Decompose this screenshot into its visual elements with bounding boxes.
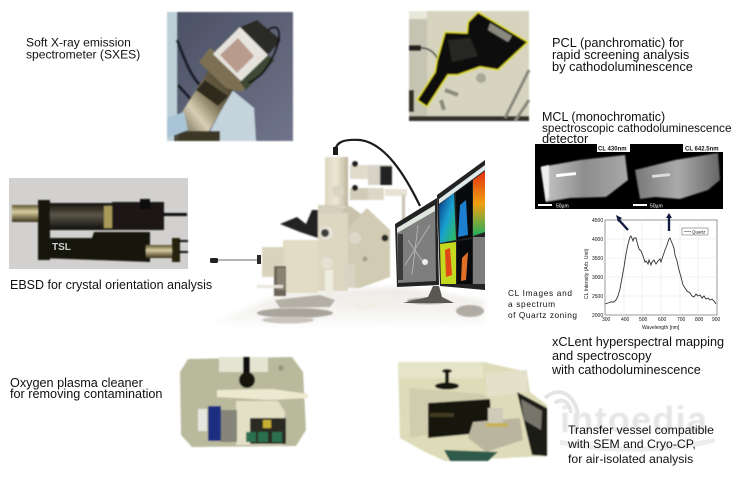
text: CL images caption: of Quartz zoning <box>508 310 577 320</box>
image: EBSD detector <box>9 178 188 269</box>
text: PCL label: PCL (panchromatic) for <box>552 35 685 50</box>
axis titles: Wavelength [nm] <box>642 325 680 331</box>
text: xCLent label: xCLent hyperspectral mapping <box>552 335 724 349</box>
text: oxygen plasma cleaner label: for removing contamination <box>10 387 162 401</box>
text: CL images caption: a spectrum <box>508 299 555 309</box>
arrow: blue peak arrow right <box>666 213 672 231</box>
text: CL images caption: CL Images and <box>508 288 572 298</box>
text: xCLent label: and spectroscopy <box>552 349 652 363</box>
CL image 642.5nm: 50µm <box>650 204 663 210</box>
CL image 642.5nm: CL 642.5nm <box>685 146 719 152</box>
table surface and shadows <box>213 287 485 326</box>
monitor right with colour maps <box>437 160 485 290</box>
y axis ticks: 3500 <box>592 256 603 262</box>
CL image 430nm <box>535 144 630 210</box>
x axis ticks: 900 <box>712 317 721 323</box>
text: xCLent label <box>551 335 724 377</box>
cable <box>335 140 420 206</box>
spectrum line <box>605 236 716 304</box>
text: xCLent label: with cathodoluminescence <box>551 363 701 377</box>
text: MCL label: detector <box>542 131 589 146</box>
text: oxygen plasma cleaner label <box>10 376 162 401</box>
monitor left <box>395 198 454 303</box>
black side detector <box>280 210 318 238</box>
image: CL quartz images <box>535 144 723 210</box>
text: transfer vessel label <box>567 423 714 466</box>
text: PCL label: by cathodoluminescence <box>552 59 693 74</box>
image: PCL panchromatic detector <box>409 11 529 121</box>
y axis ticks: 3000 <box>592 275 603 281</box>
text: oxygen plasma cleaner label: Oxygen plasma cleaner <box>10 376 143 390</box>
text: CL images caption <box>508 288 577 320</box>
y axis ticks: 4000 <box>592 237 603 243</box>
CL image 430nm: CL 430nm <box>598 146 627 152</box>
watermark <box>545 392 715 449</box>
x axis ticks: 300 <box>602 317 611 323</box>
text: SXES label: Soft X-ray emission <box>26 36 131 50</box>
y axis ticks: 4500 <box>592 218 603 224</box>
text: PCL label <box>552 35 693 74</box>
arrow: blue peak arrow left <box>616 215 628 230</box>
text: MCL label: spectroscopic cathodoluminescence <box>542 121 732 135</box>
x axis ticks: 400 <box>621 317 630 323</box>
y axis ticks <box>592 218 603 319</box>
text: transfer vessel label: with SEM and Cryo-CP, <box>567 437 696 451</box>
text: PCL label: rapid screening analysis <box>552 47 689 62</box>
microscope column <box>257 157 407 296</box>
text: MCL label: MCL (monochromatic) <box>542 110 665 124</box>
x axis ticks: 800 <box>695 317 704 323</box>
text: EBSD label: EBSD for crystal orientation analysis <box>10 278 212 292</box>
text: MCL label <box>542 110 732 146</box>
chart legend: Quartz <box>692 230 706 234</box>
detectors on top <box>350 165 372 179</box>
x axis ticks: 700 <box>677 317 686 323</box>
keyboard and control pad <box>275 294 484 317</box>
stage rod and handle <box>210 255 261 264</box>
text: transfer vessel label: Transfer vessel compatible <box>568 423 714 437</box>
CL image 430nm: 50µm <box>556 204 569 210</box>
image: EBSD detector: TSL <box>52 242 71 253</box>
text: SXES label <box>26 36 140 62</box>
text: transfer vessel label: for air-isolated analysis <box>568 452 693 466</box>
chart: CL spectrum of quartz: CL Intensity (Arb. Unit) <box>584 248 590 299</box>
chart: CL spectrum of quartz <box>584 218 721 331</box>
x axis ticks <box>602 317 721 323</box>
y axis ticks: 2500 <box>592 294 603 300</box>
x axis ticks: 500 <box>639 317 648 323</box>
x axis ticks: 600 <box>658 317 667 323</box>
y axis ticks: 2000 <box>592 313 603 319</box>
CL image 642.5nm <box>630 144 723 210</box>
image: main electron microscope with monitors <box>210 140 485 326</box>
watermark: intoedia <box>560 399 708 440</box>
image: transfer vessel <box>398 362 547 461</box>
image: oxygen plasma cleaner <box>180 357 308 447</box>
image: soft X-ray emission spectrometer <box>167 12 293 141</box>
text: SXES label: spectrometer (SXES) <box>26 48 140 62</box>
